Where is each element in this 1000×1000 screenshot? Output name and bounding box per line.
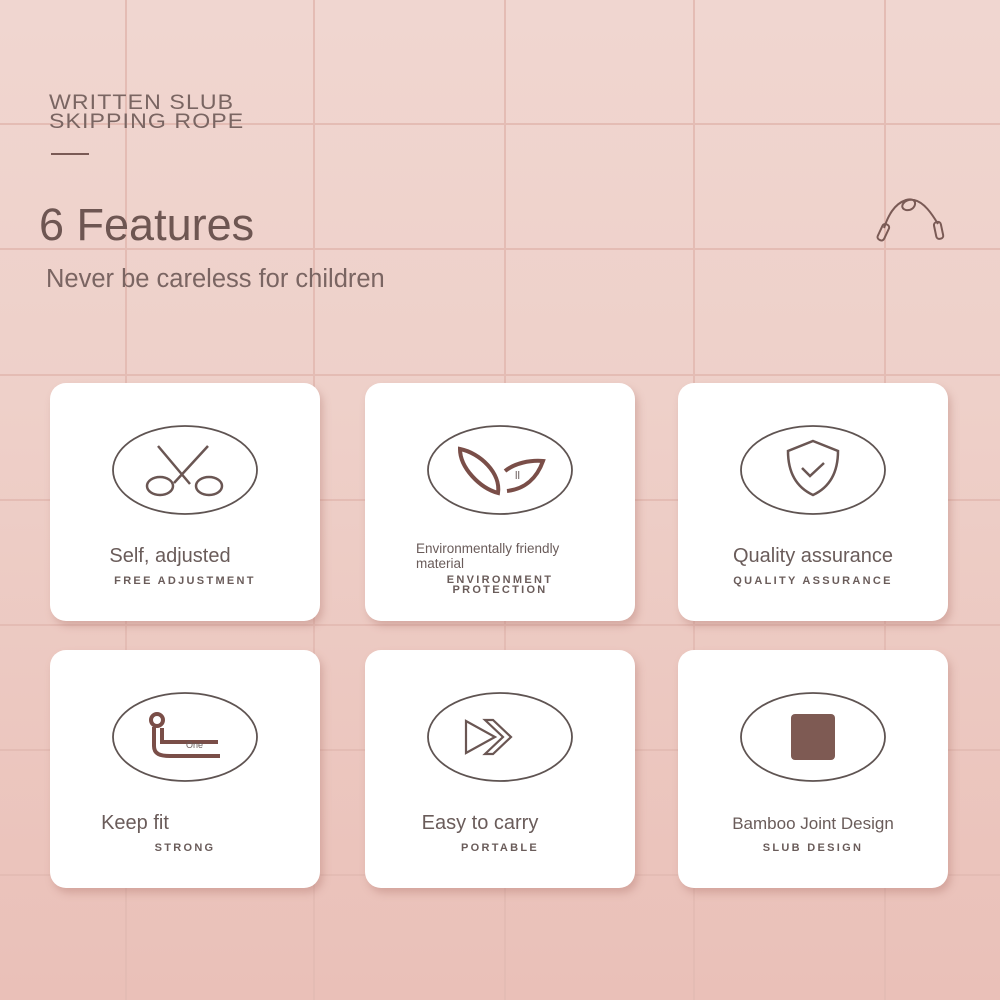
icon: leaves: ll (515, 470, 520, 482)
text: Self, adjusted (109, 545, 231, 567)
accent dash (51, 153, 89, 155)
label: STRONG (155, 842, 215, 854)
subtitle: Never be careless for children (46, 265, 385, 293)
label (447, 574, 553, 596)
card: portable (365, 650, 635, 888)
label: PROTECTION (452, 584, 548, 596)
label: SLUB DESIGN (763, 842, 863, 854)
text: material (416, 556, 464, 571)
label: PORTABLE (461, 842, 539, 854)
brand heading: WRITTEN SLUB (49, 91, 234, 114)
icon: fast forward (427, 692, 573, 782)
text: Keep fit (101, 812, 169, 834)
icon: skipping rope (876, 198, 944, 242)
text: Easy to carry (422, 812, 538, 834)
title: 6 Features (39, 199, 254, 250)
text: Environmentally friendly (416, 541, 559, 556)
text: Bamboo Joint Design (732, 814, 894, 833)
label: FREE ADJUSTMENT (114, 575, 256, 587)
icon: bamboo joint (740, 692, 886, 782)
icon: arm: One (186, 740, 203, 750)
text (416, 541, 560, 571)
text: Quality assurance (733, 545, 893, 567)
icon: arm (112, 692, 258, 782)
label: ENVIRONMENT (447, 574, 553, 586)
card: environment protection (365, 383, 635, 621)
icon: leaves (427, 425, 573, 515)
brand heading (49, 91, 244, 133)
card: free adjustment (50, 383, 320, 621)
card: quality assurance (678, 383, 948, 621)
label: QUALITY ASSURANCE (733, 575, 893, 587)
brand heading: SKIPPING ROPE (49, 110, 244, 133)
icon: shield (740, 425, 886, 515)
icon: scissors (112, 425, 258, 515)
card: slub design (678, 650, 948, 888)
card: strong (50, 650, 320, 888)
